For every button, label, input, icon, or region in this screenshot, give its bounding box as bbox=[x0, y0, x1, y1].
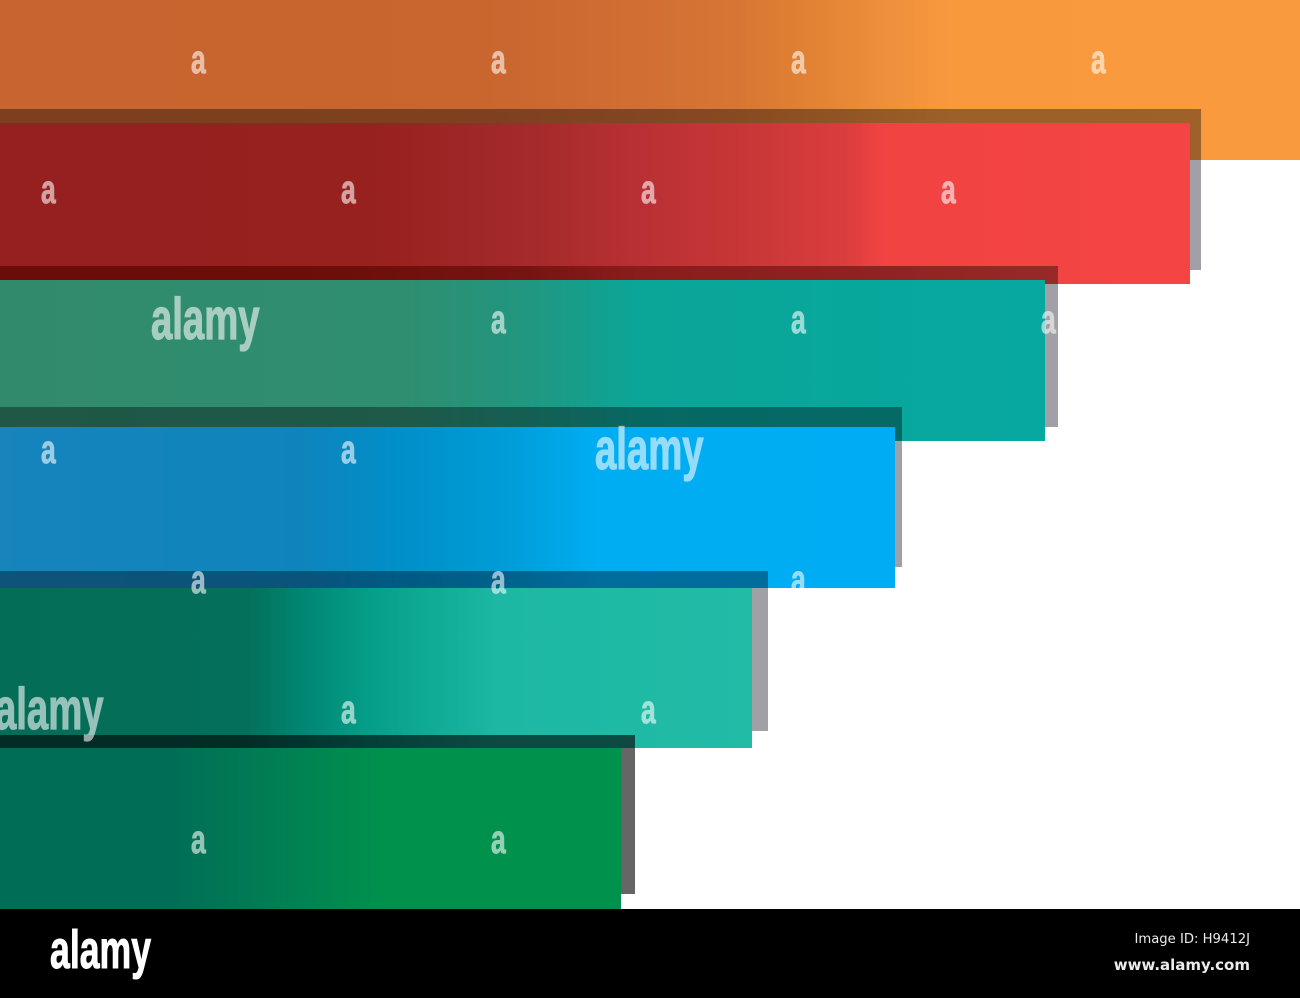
watermark letters: a bbox=[41, 428, 56, 472]
watermark letters: alamy bbox=[151, 287, 260, 352]
bar 5: sea green bbox=[0, 588, 752, 748]
watermark letters: a bbox=[191, 558, 206, 602]
watermark letters: a bbox=[641, 168, 656, 212]
bar 4 shadow bbox=[0, 407, 902, 567]
watermark letters: a bbox=[491, 558, 506, 602]
watermark letters: a bbox=[491, 298, 506, 342]
bar 3 shadow strip over red bbox=[0, 266, 1058, 280]
bar 1: orange bbox=[0, 0, 1300, 160]
watermark letters: a bbox=[791, 38, 806, 82]
website: www.alamy.com bbox=[1114, 956, 1250, 974]
image id: Image ID: H9412J bbox=[1134, 932, 1250, 947]
footer band bbox=[0, 909, 1300, 998]
watermark letters: a bbox=[341, 168, 356, 212]
watermark letters: a bbox=[341, 688, 356, 732]
bar 5 shadow bbox=[0, 571, 768, 731]
bar 4: blue bbox=[0, 427, 895, 588]
watermark letters: a bbox=[941, 428, 956, 472]
watermark letters: a bbox=[941, 168, 956, 212]
bar 2 shadow bbox=[0, 109, 1201, 270]
bar 6: green bbox=[0, 748, 621, 909]
footer logo: alamy bbox=[50, 920, 151, 980]
watermark letters: a bbox=[191, 818, 206, 862]
watermark letters: a bbox=[791, 298, 806, 342]
watermark letters: a bbox=[641, 688, 656, 732]
bar 6 shadow bbox=[0, 735, 635, 894]
watermark letters: alamy bbox=[595, 417, 704, 482]
watermark letters: a bbox=[191, 38, 206, 82]
watermark letters: a bbox=[491, 38, 506, 82]
bar 2: red bbox=[0, 123, 1190, 284]
bar 3: teal bbox=[0, 280, 1045, 441]
watermark letters: a bbox=[41, 168, 56, 212]
watermark letters: a bbox=[341, 428, 356, 472]
bar 3 shadow bbox=[0, 266, 1058, 427]
watermark letters: a bbox=[1041, 298, 1056, 342]
watermark letters: a bbox=[791, 558, 806, 602]
watermark letters: a bbox=[491, 818, 506, 862]
watermark letters: a bbox=[1091, 38, 1106, 82]
